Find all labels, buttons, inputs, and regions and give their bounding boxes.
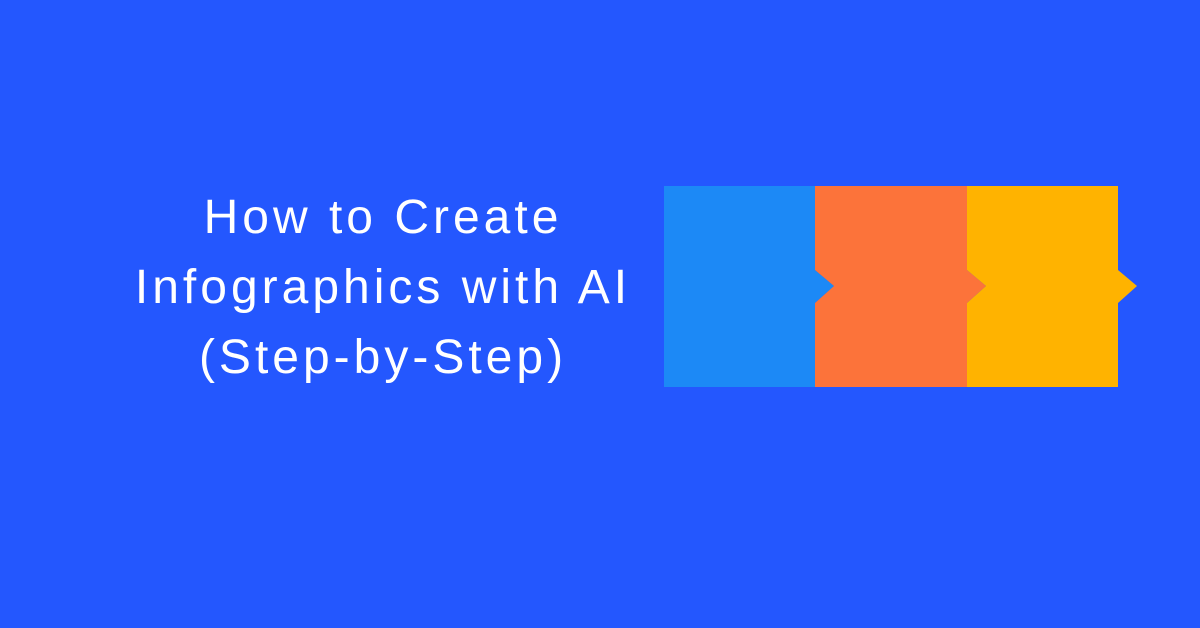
- title: Infographics with AI: [135, 261, 631, 314]
- title: How to Create: [204, 191, 562, 244]
- step 3 block: yellow: [967, 186, 1137, 387]
- step 1 block: blue: [664, 186, 834, 387]
- title: (Step-by-Step): [199, 331, 567, 384]
- title: [135, 191, 631, 384]
- step 2 block: orange: [815, 186, 986, 387]
